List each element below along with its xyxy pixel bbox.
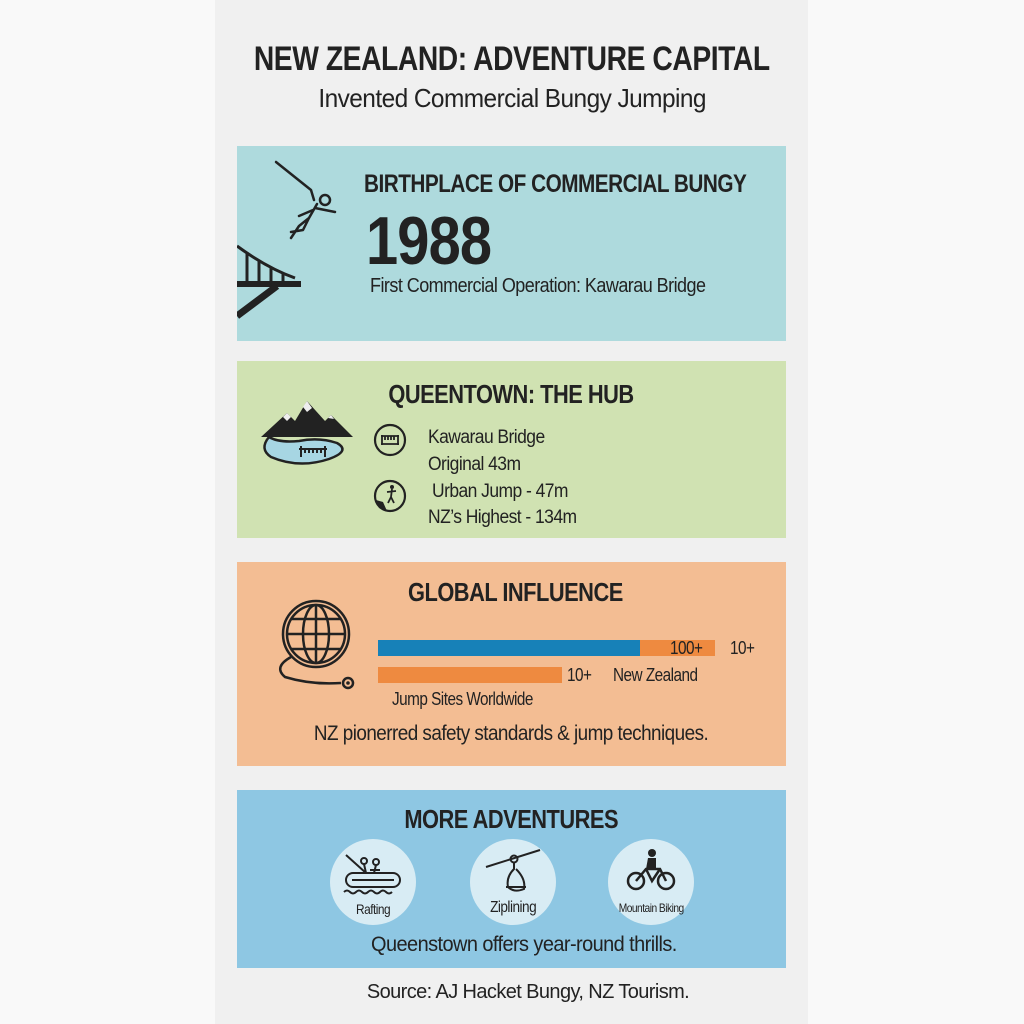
panel: birthplace [237,146,786,341]
panel: global influence [237,562,786,766]
icon: rafting [330,839,416,925]
bar chart: New Zealand [613,665,698,685]
icon: mountains and lake [261,401,353,465]
heading: BIRTHPLACE OF COMMERCIAL BUNGY [364,170,746,198]
icon: bridge circle [374,424,406,456]
caption: Queenstown offers year-round thrills. [371,933,676,956]
icon: ziplining [470,839,556,925]
icon: globe with rope [278,600,354,690]
bar chart [378,638,754,685]
bar chart: 100+ [670,638,702,658]
caption: NZ pionerred safety standards & jump techniques. [314,722,709,745]
bar label: Jump Sites Worldwide [392,689,533,709]
heading: QUEENTOWN: THE HUB [389,379,634,409]
list: jump sites: NZ’s Highest - 134m [428,507,577,528]
title: NEW ZEALAND: ADVENTURE CAPITAL [254,40,770,78]
icon: mountain biking: Mountain Biking [619,901,683,915]
big number: 1988 [366,203,491,279]
bar chart: 10+ [567,665,591,685]
heading: MORE ADVENTURES [405,804,618,834]
source: Source: AJ Hacket Bungy, NZ Tourism. [367,981,689,1003]
icon: bungy jumper and bridge [237,160,336,319]
icon: ziplining: Ziplining [490,899,536,916]
bar chart: 10+ [730,638,754,658]
subtitle: Invented Commercial Bungy Jumping [318,83,706,113]
caption: First Commercial Operation: Kawarau Bridge [370,275,705,297]
icon: urban jump circle [374,480,406,512]
list: jump sites: Kawarau Bridge [428,427,545,448]
panel: more adventures [237,790,786,968]
list: jump sites: Original 43m [428,454,520,475]
icon: mountain biking [608,839,694,925]
list: jump sites [428,427,577,528]
icon: rafting: Rafting [356,901,390,917]
panel: queenstown [237,361,786,538]
list: jump sites: Urban Jump - 47m [432,481,568,502]
heading: GLOBAL INFLUENCE [408,577,623,607]
